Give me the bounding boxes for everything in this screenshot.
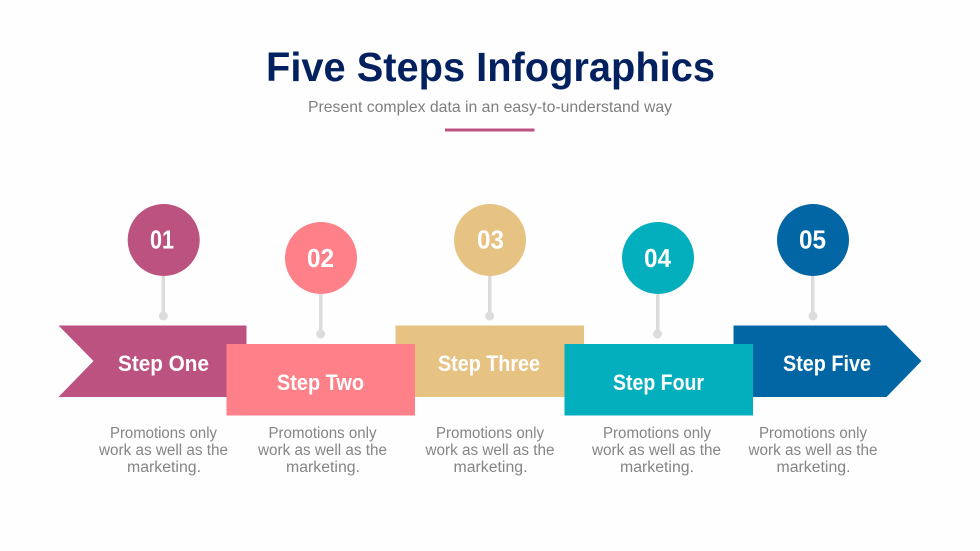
step 3 description xyxy=(425,425,554,476)
pin 1: 01 xyxy=(150,224,174,254)
step 4 description: marketing. xyxy=(620,459,694,476)
step 1 description xyxy=(98,425,228,476)
pin 5 xyxy=(777,204,849,320)
step 2 description xyxy=(257,425,387,476)
step 4 banner: Step Four xyxy=(613,370,704,395)
step 3 description: marketing. xyxy=(454,459,528,476)
step 1 banner: Step One xyxy=(118,351,209,376)
step 5 banner xyxy=(734,326,922,397)
step 5 description: Promotions only xyxy=(759,425,867,442)
step 4 description: Promotions only xyxy=(603,425,711,442)
pin 2 xyxy=(285,222,357,338)
step 3 banner xyxy=(396,326,584,397)
step 2 banner: Step Two xyxy=(277,370,364,395)
step 5 description: work as well as the xyxy=(748,442,878,459)
step 2 description: work as well as the xyxy=(257,442,387,459)
step 2 description: marketing. xyxy=(286,459,360,476)
step 5 description: marketing. xyxy=(776,459,850,476)
step 1 description: marketing. xyxy=(127,459,201,476)
pin 3: 03 xyxy=(477,224,504,254)
step 3 description: Promotions only xyxy=(436,425,544,442)
pin 4 xyxy=(622,222,694,338)
step 5 description xyxy=(748,425,878,476)
step 4 description xyxy=(591,425,721,476)
step 3 description: work as well as the xyxy=(425,442,554,459)
pin 4: 04 xyxy=(644,243,672,273)
pin 2: 02 xyxy=(307,243,334,273)
step 1 banner xyxy=(58,326,246,397)
step 2 banner xyxy=(226,344,415,416)
step 1 description: work as well as the xyxy=(98,442,228,459)
step 2 description: Promotions only xyxy=(268,425,377,442)
step 5 banner: Step Five xyxy=(783,351,871,376)
step 1 description: Promotions only xyxy=(110,425,217,442)
title underline xyxy=(445,128,534,132)
subtitle: Present complex data in an easy-to-understand way xyxy=(308,99,672,116)
step 4 banner xyxy=(564,344,753,416)
title: Five Steps Infographics xyxy=(266,44,715,90)
pin 1 xyxy=(128,204,200,320)
pin 5: 05 xyxy=(799,224,826,254)
pin 3 xyxy=(454,204,526,320)
step 3 banner: Step Three xyxy=(438,351,540,376)
step 4 description: work as well as the xyxy=(591,442,721,459)
